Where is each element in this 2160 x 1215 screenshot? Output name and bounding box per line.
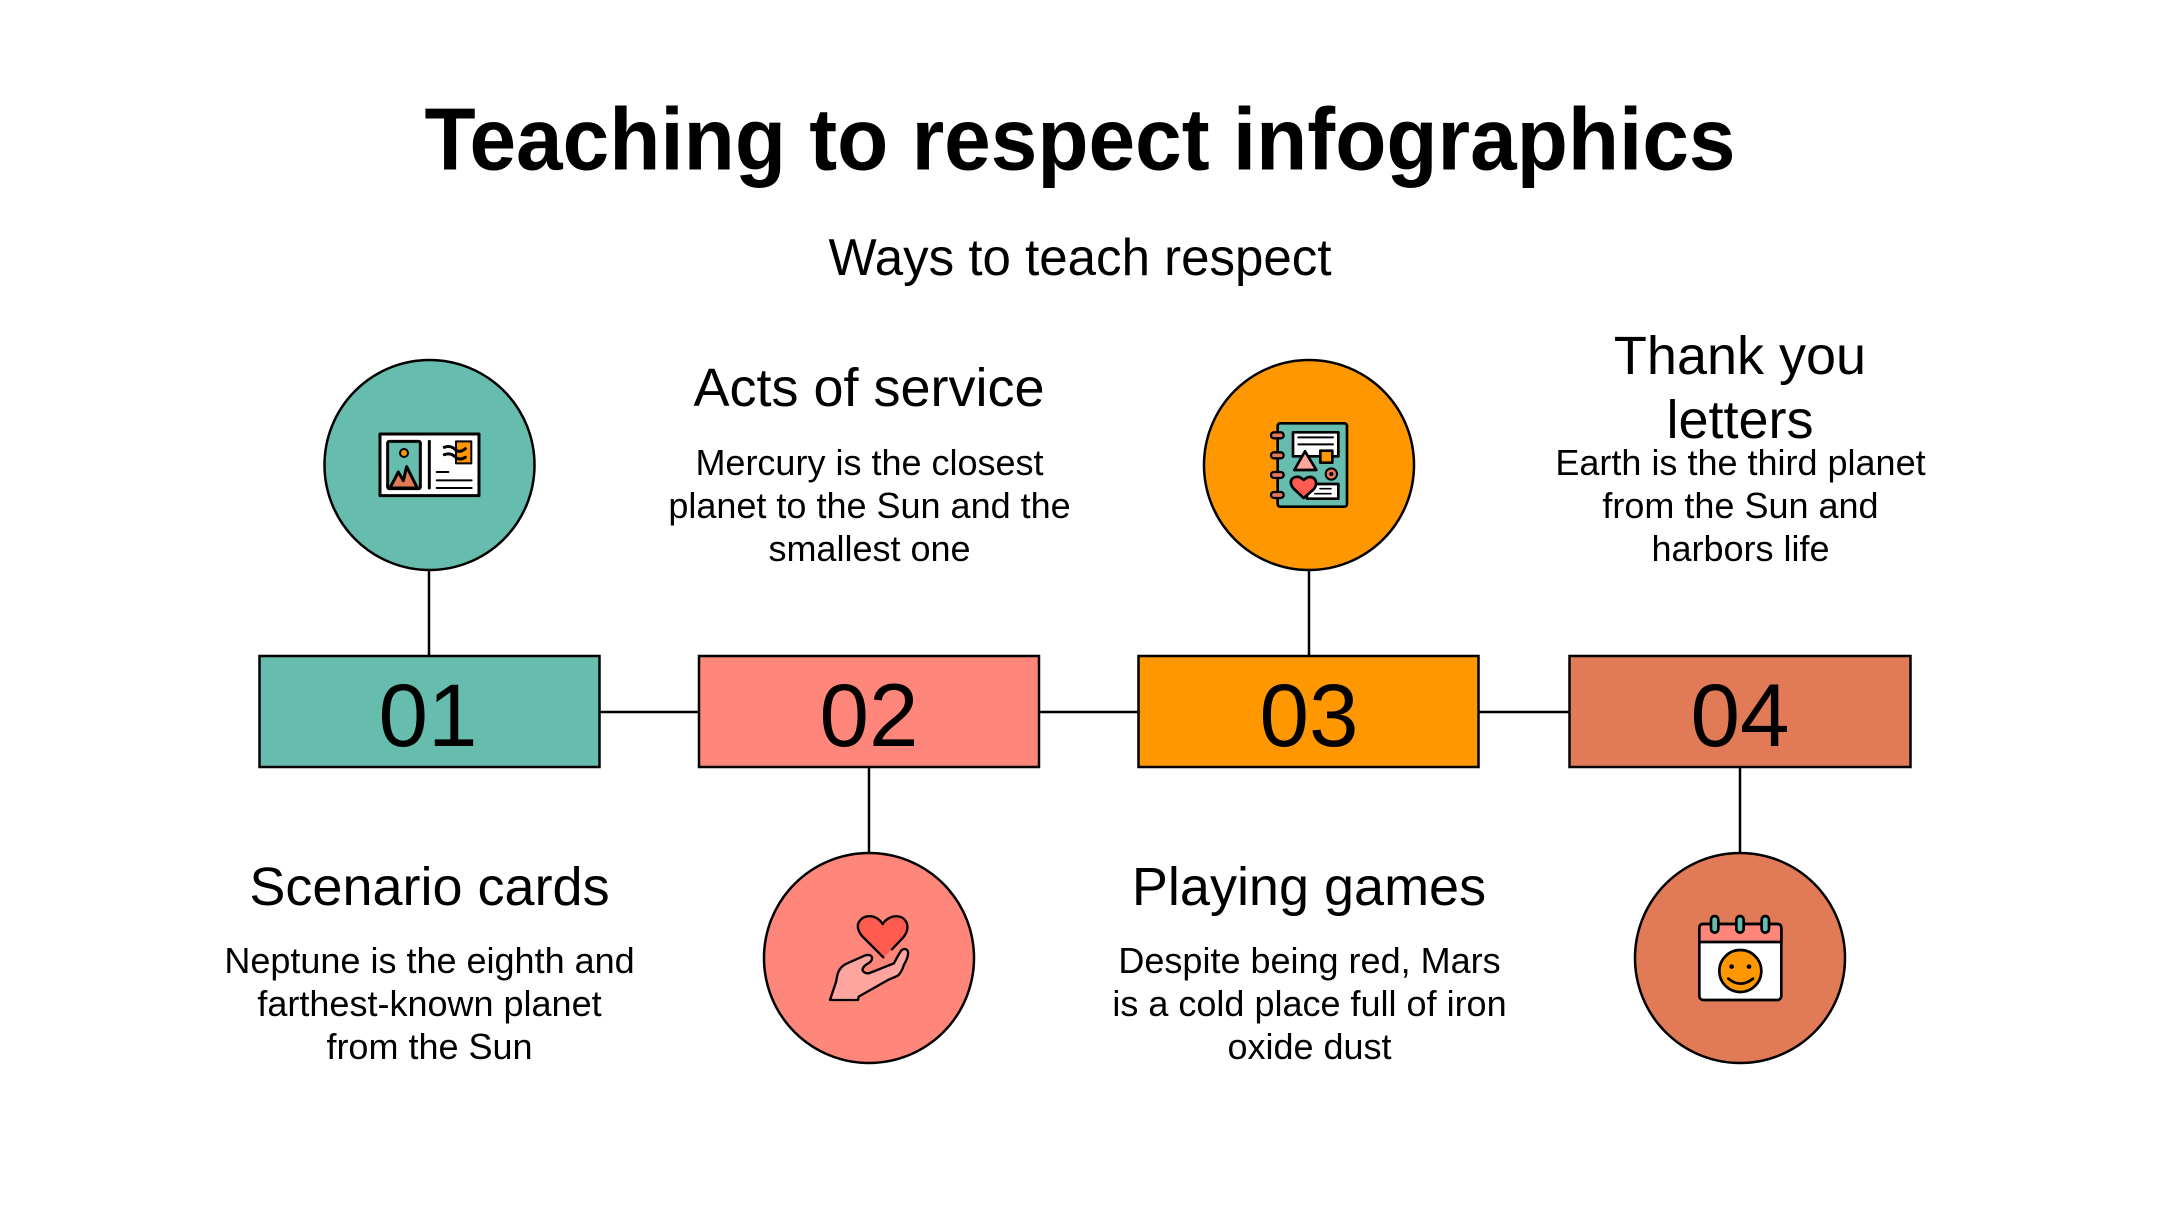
box 01 [260, 656, 600, 767]
text: acts of service: planet to the Sun and the [668, 485, 1071, 526]
text: acts of service: smallest one [768, 528, 971, 569]
text: acts of service [668, 358, 1071, 569]
box 01: 01 [378, 665, 478, 765]
text: scenario cards: from the Sun [326, 1026, 533, 1067]
icon: calendar smiley [1699, 916, 1781, 1000]
subtitle: Ways to teach respect [828, 229, 1332, 287]
box 03 [1138, 656, 1478, 767]
text: acts of service: Mercury is the closest [695, 442, 1044, 483]
box 04 [1570, 656, 1910, 767]
icon: notebook [1271, 423, 1347, 507]
step 01 column [224, 360, 635, 1067]
text: thank you letters: letters [1666, 390, 1814, 450]
box 03: 03 [1260, 665, 1358, 765]
text: thank you letters [1555, 326, 1926, 569]
text: playing games: oxide dust [1227, 1026, 1392, 1067]
step 02 column [668, 358, 1071, 1063]
text: playing games: Playing games [1132, 857, 1486, 917]
text: thank you letters: from the Sun and [1602, 485, 1879, 526]
icon: postcard [380, 434, 479, 496]
box 02: 02 [820, 665, 918, 765]
circle 4 with calendar icon [1635, 853, 1845, 1063]
circle 1 with postcard icon [324, 360, 534, 570]
circle 3 with notebook icon [1204, 360, 1414, 570]
connector lines [429, 570, 1740, 853]
step 04 column [1555, 326, 1926, 1063]
text: scenario cards: farthest-known planet [257, 983, 602, 1024]
text: acts of service: Acts of service [693, 358, 1045, 418]
text: thank you letters: harbors life [1651, 528, 1830, 569]
text: thank you letters: Earth is the third planet [1555, 442, 1926, 483]
step 03 column [1112, 360, 1507, 1067]
text: thank you letters: Thank you [1614, 326, 1866, 386]
circle 2 with hand and heart icon [764, 853, 974, 1063]
text: scenario cards: Neptune is the eighth and [224, 940, 635, 981]
text: scenario cards: Scenario cards [249, 857, 610, 917]
icon: hand holding heart [830, 916, 908, 1000]
text: playing games: Despite being red, Mars [1118, 940, 1501, 981]
text: playing games [1112, 857, 1507, 1067]
text: playing games: is a cold place full of iron [1112, 983, 1507, 1024]
box 04: 04 [1690, 665, 1790, 765]
text: scenario cards [224, 857, 635, 1067]
title: Teaching to respect infographics [424, 90, 1736, 188]
box 02 [699, 656, 1039, 767]
